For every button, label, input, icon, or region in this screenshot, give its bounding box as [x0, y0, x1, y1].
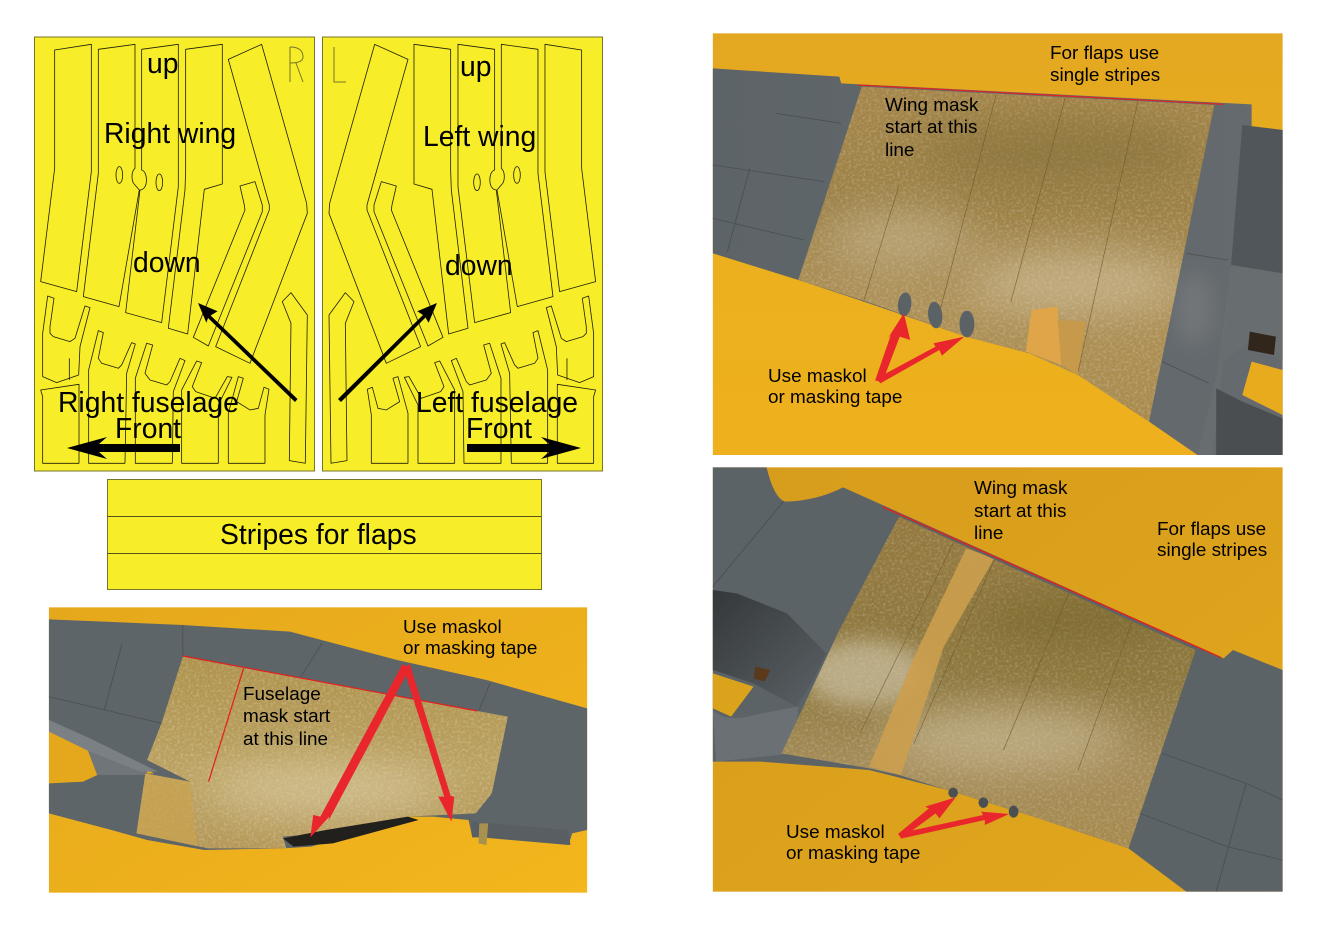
mask cut lines	[329, 44, 596, 463]
label: up: up	[147, 47, 178, 79]
mask cut lines	[41, 44, 307, 463]
letter L	[334, 47, 346, 82]
label: left wing: Left wing	[423, 120, 536, 152]
label: front: Front	[115, 412, 181, 444]
label: wing mask start at this line: line	[885, 140, 914, 161]
arrow: diagonal direction	[198, 303, 298, 402]
label: front: Front	[466, 412, 532, 444]
photo artwork	[713, 33, 1283, 455]
label: fuselage mask start at this line: Fuselage	[243, 684, 321, 705]
label: stripes for flaps: Stripes for flaps	[220, 518, 417, 550]
arrow: diagonal direction	[338, 303, 437, 402]
label: for flaps use single stripes: For flaps use	[1157, 519, 1266, 540]
label: wing mask start at this line: start at this	[885, 117, 977, 138]
label: fuselage mask start at this line: mask start	[243, 706, 331, 727]
panel: left wing and fuselage mask sheet	[322, 37, 602, 471]
label: for flaps use single stripes: For flaps use	[1050, 43, 1159, 64]
label: wing mask start at this line: Wing mask	[974, 478, 1068, 499]
panel: right wing and fuselage mask sheet	[34, 37, 314, 471]
strip background	[108, 480, 542, 590]
label: fuselage mask start at this line: at this line	[243, 729, 328, 750]
letter R	[290, 47, 303, 82]
photo: right wing masked, top right	[713, 33, 1283, 455]
label: use maskol or masking tape: Use maskol	[768, 366, 867, 387]
label: down: down	[445, 249, 513, 281]
sheet background	[322, 37, 602, 471]
label: right fuselage: Right fuselage	[58, 386, 239, 418]
panel: stripes for flaps	[107, 480, 542, 590]
label: up: up	[460, 50, 491, 82]
label: use maskol or masking tape: Use maskol	[403, 617, 502, 638]
label: use maskol or masking tape: or masking tape	[403, 638, 537, 659]
label: use maskol or masking tape: or masking tape	[786, 843, 920, 864]
label: wing mask start at this line: line	[974, 523, 1003, 544]
photo artwork	[713, 467, 1283, 892]
photo: left wing masked, bottom right	[713, 467, 1283, 892]
label: wing mask start at this line: start at this	[974, 501, 1066, 522]
photo artwork	[49, 607, 587, 893]
arrow: front to the right	[467, 437, 581, 459]
label: right wing: Right wing	[104, 117, 236, 149]
sheet background	[34, 37, 314, 471]
label: use maskol or masking tape: Use maskol	[786, 822, 885, 843]
photo: fuselage masked, bottom left	[49, 607, 587, 893]
label: left fuselage: Left fuselage	[416, 386, 578, 418]
label: for flaps use single stripes: single stripes	[1157, 540, 1267, 561]
arrow: front to the left	[67, 437, 180, 459]
label: use maskol or masking tape: or masking tape	[768, 387, 902, 408]
label: down: down	[133, 246, 201, 278]
label: for flaps use single stripes: single stripes	[1050, 65, 1160, 86]
label: wing mask start at this line: Wing mask	[885, 95, 979, 116]
